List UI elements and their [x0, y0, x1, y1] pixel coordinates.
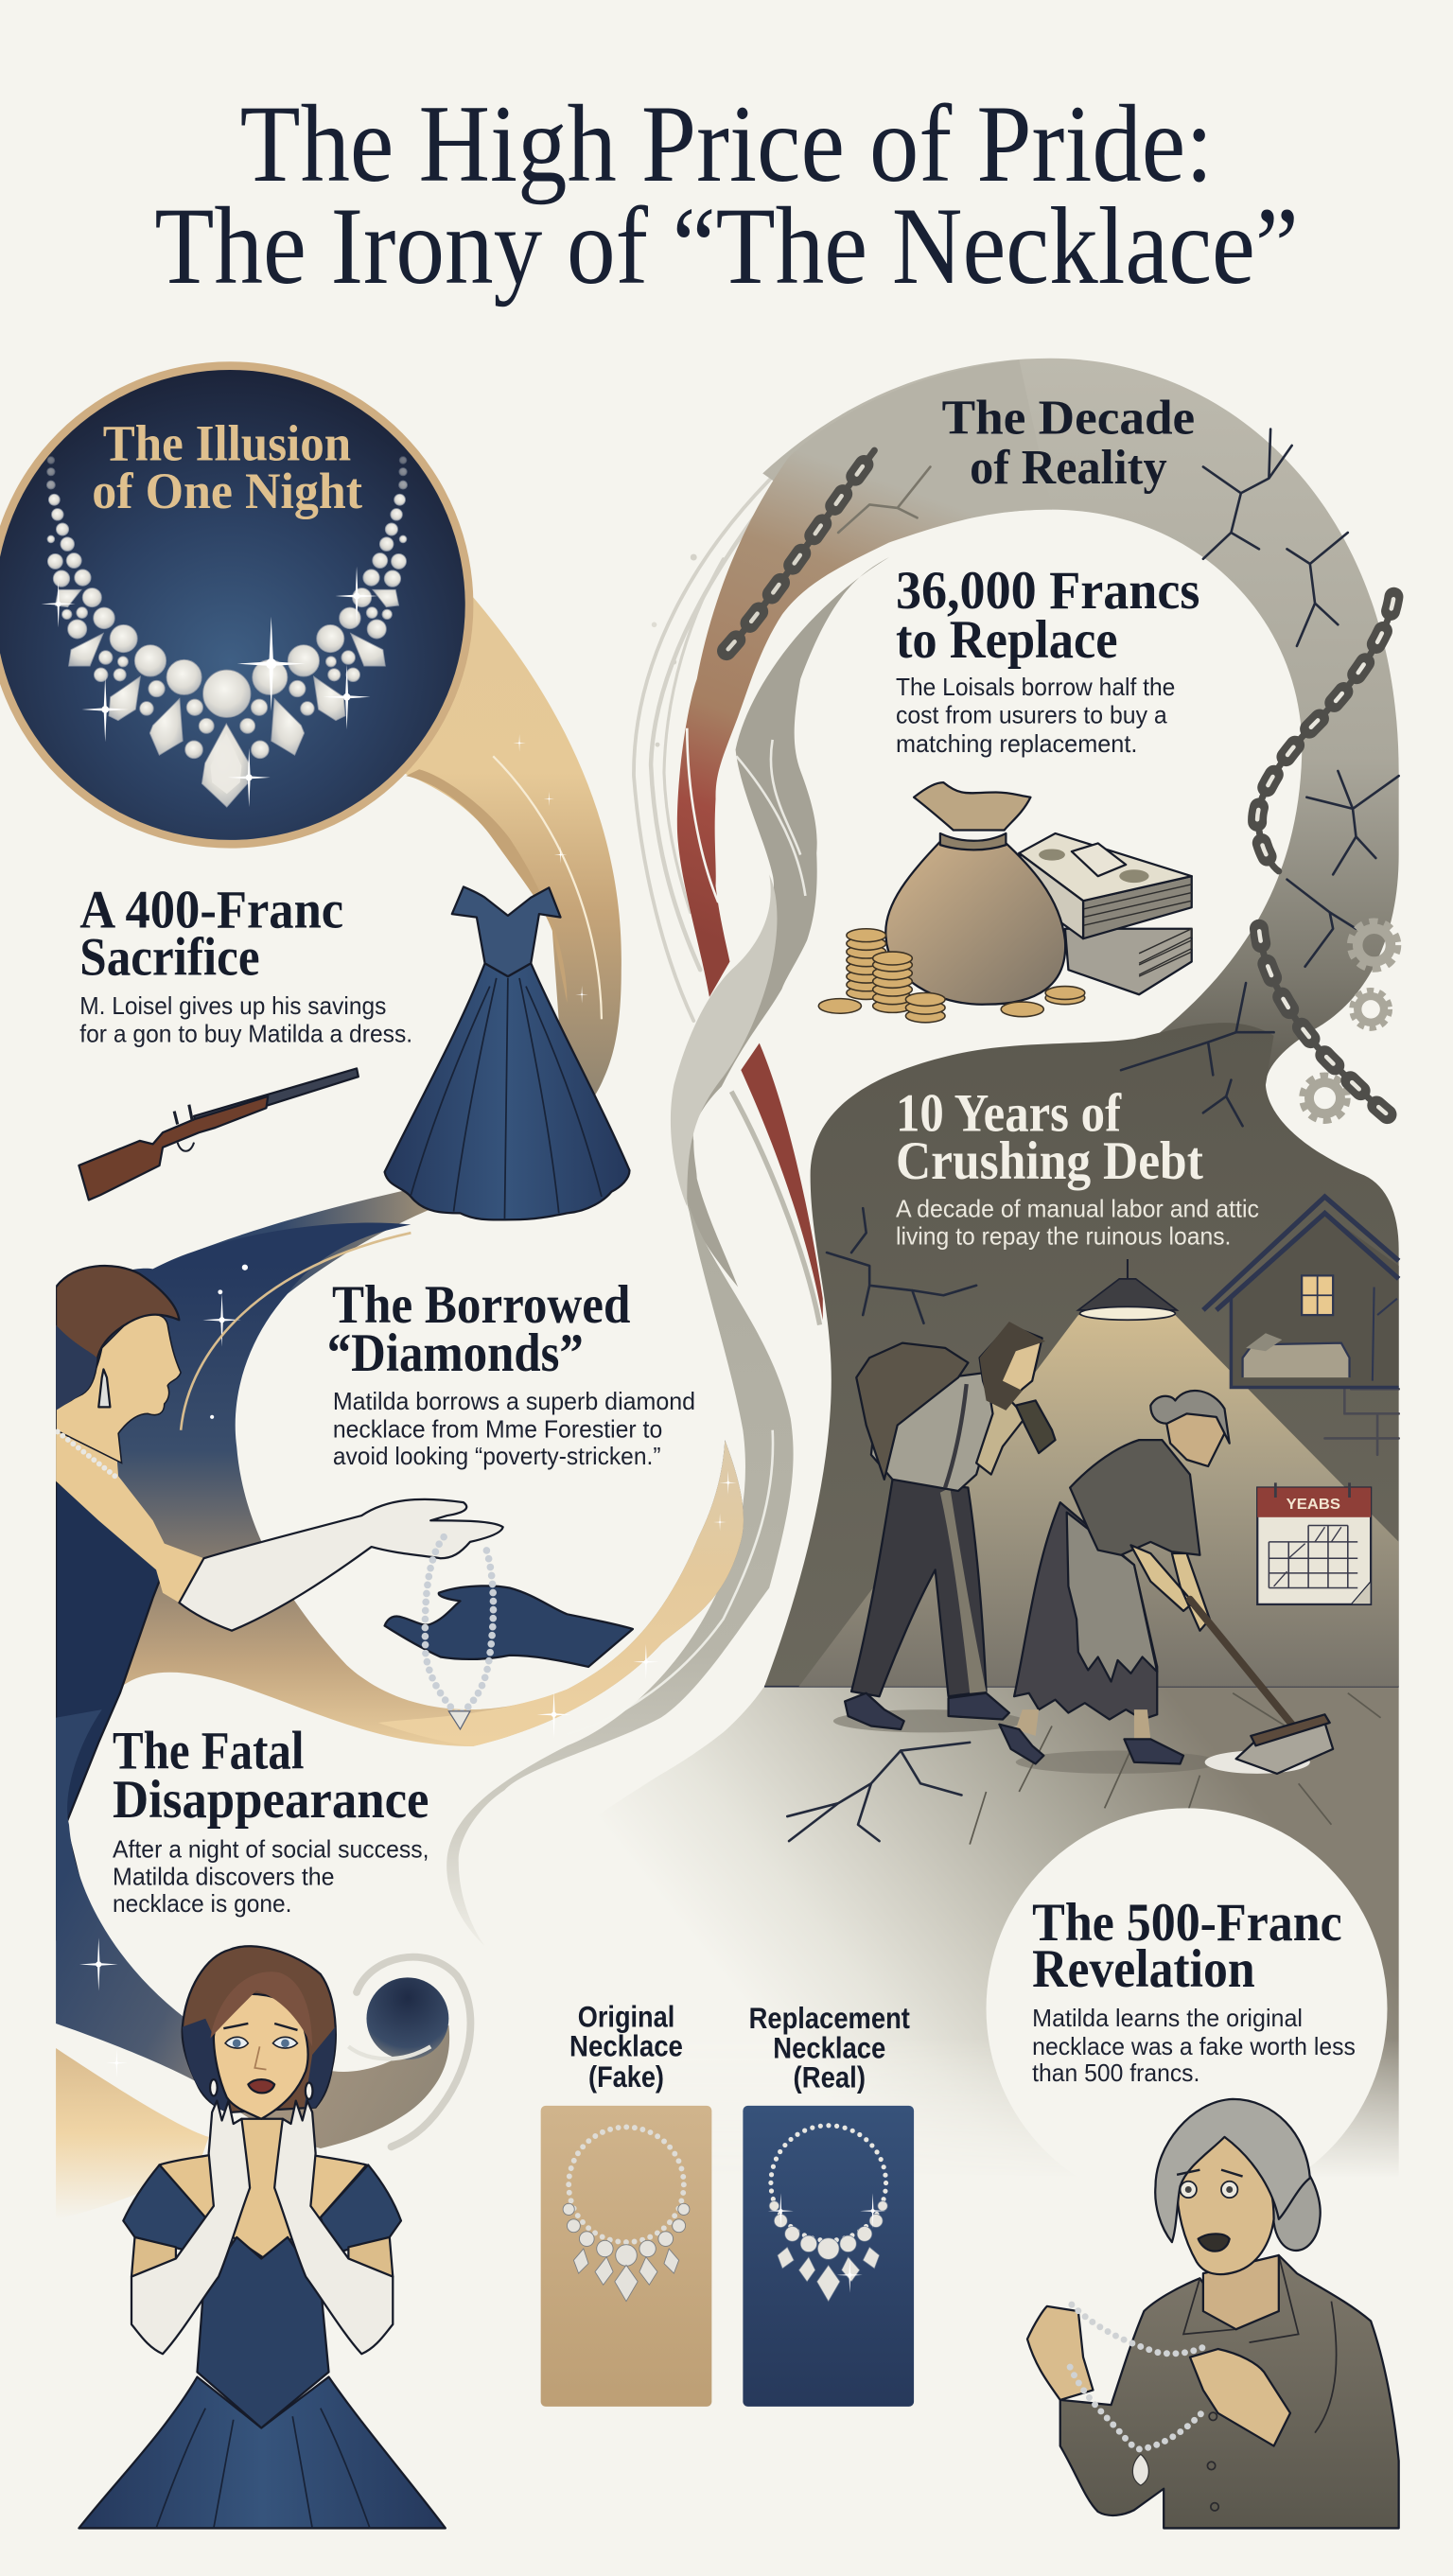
right glove: [274, 2101, 393, 2354]
mouth: [248, 2079, 274, 2093]
text block: the fatal disappearance: [113, 1722, 429, 1918]
man shoes: [845, 1693, 1009, 1729]
hair back: [183, 1946, 336, 2112]
heading and text: 10 years of crushing debt: living to repay the ruinous loans.: [896, 1221, 1231, 1250]
shirt: [1060, 2255, 1399, 2528]
man arm: [976, 1375, 1025, 1475]
panel: the borrowed diamonds swoosh: [56, 1223, 744, 1746]
comparison: original necklace fake: [541, 2000, 711, 2407]
eyes: [225, 2037, 297, 2048]
thin strand: [731, 1092, 820, 1325]
text bubble: the 500-franc revelation: than 500 francs.: [1032, 2059, 1199, 2087]
man hand and strap: [1016, 1400, 1056, 1453]
text block: the borrowed diamonds: avoid looking “poverty-stricken.”: [333, 1442, 660, 1470]
lower red stripe: [741, 1043, 823, 1320]
dress: [56, 1481, 165, 1939]
hair shadow: [183, 2019, 335, 2112]
man sack: [856, 1343, 968, 1480]
hair: [56, 1266, 179, 1407]
text block: the borrowed diamonds: The Borrowed: [332, 1275, 630, 1335]
text block: a 400-franc sacrifice: A 400-Franc: [79, 881, 343, 940]
head: [1165, 1393, 1224, 1466]
wall cracks: [827, 1208, 1399, 1455]
icon: blue ball gown: [385, 886, 629, 1219]
title: The Irony of “The Necklace”: [154, 185, 1299, 307]
man legs: [851, 1480, 987, 1696]
man head: [980, 1325, 1042, 1407]
hair: [1150, 1391, 1230, 1444]
icon: money bag: [885, 782, 1065, 1005]
skirt: [1014, 1502, 1157, 1720]
text bubble: the 500-franc revelation: [987, 1808, 1387, 2209]
white glove: [179, 1499, 503, 1631]
earrings: [210, 2079, 218, 2095]
heading: the decade of reality: [942, 392, 1195, 495]
panel: the illusion of one night: of One Night: [92, 463, 362, 519]
neck: [1203, 2255, 1279, 2329]
fake necklace: [563, 2127, 690, 2302]
text block: a 400-franc sacrifice: M. Loisel gives up his savings: [79, 991, 386, 1020]
text block: the borrowed diamonds: necklace from Mme Forestier to: [333, 1414, 662, 1443]
face: [56, 1314, 181, 1463]
icon: hanging diamond necklace: [425, 1537, 493, 1729]
heading and text: 36,000 francs: The Loisals borrow half the: [896, 673, 1175, 701]
necklace on neck: [58, 1431, 115, 1476]
heading and text: 10 years of crushing debt: A decade of manual labor and attic: [896, 1195, 1259, 1223]
chains: [726, 450, 1393, 1114]
apron: [1067, 1513, 1157, 1682]
figure: matilda with gloved arm: [56, 1266, 503, 1939]
heading: The Illusion: [103, 415, 351, 472]
figure: distressed matilda: [79, 1946, 446, 2528]
face: [1177, 2137, 1274, 2274]
title: [154, 83, 1299, 307]
light cone from lamp: [798, 1315, 1399, 1687]
text block: the fatal disappearance: After a night of social success,: [113, 1834, 429, 1863]
icon: coin stacks: [818, 929, 1085, 1023]
comparison: replacement necklace real: [743, 2002, 914, 2407]
mouth: [1199, 2234, 1230, 2252]
icon: banknote stacks: [1019, 833, 1192, 994]
dark upper ribbon: [673, 557, 889, 1288]
panel: 10 years of crushing debt wall: [764, 1023, 1399, 1687]
eyes and brows: [1177, 2170, 1243, 2198]
text bubble: the 500-franc revelation: Revelation: [1032, 1939, 1255, 1999]
cracks on ring: [838, 429, 1399, 967]
heading and text: 36,000 francs: to Replace: [896, 610, 1118, 670]
icon: swirl: [79, 1937, 470, 2147]
lower ribbon under dress: [153, 1177, 477, 1293]
heading: the decade of reality: of Reality: [970, 441, 1167, 495]
light ribbon: [671, 874, 777, 1206]
text block: a 400-franc sacrifice: Sacrifice: [79, 927, 260, 987]
hair bun: [1266, 2137, 1321, 2251]
broom: [1190, 1600, 1292, 1725]
neck and chest: [56, 1413, 203, 1603]
cracks bridging ring and wall: [1121, 983, 1274, 1126]
heading and text: 36,000 francs: [896, 561, 1199, 758]
man shirt: [871, 1373, 999, 1491]
figure: man with sack: [845, 1322, 1056, 1729]
hair dark lower: [56, 1325, 97, 1411]
ring left ribbon from brown to red: [677, 360, 1052, 997]
comparison: original necklace fake: Necklace: [569, 2030, 683, 2063]
heading: the decade of reality: The Decade: [942, 392, 1195, 446]
thin grey ribbon lines: [634, 473, 776, 1021]
bead necklace: [1070, 2304, 1203, 2485]
title: The High Price of Pride:: [240, 83, 1213, 205]
text bubble: the 500-franc revelation: necklace was a fake worth less: [1032, 2032, 1356, 2060]
comparison: replacement necklace real: Replacement: [749, 2002, 910, 2035]
comparison: original necklace fake: (Fake): [588, 2060, 664, 2094]
left glove: [131, 2101, 250, 2354]
text block: a 400-franc sacrifice: for a gon to buy Matilda a dress.: [79, 1020, 412, 1048]
text bubble: the 500-franc revelation: Matilda learns the original: [1032, 2004, 1303, 2032]
text block: a 400-franc sacrifice: [79, 881, 412, 1048]
panel: the decade of reality ring: [677, 359, 1399, 1085]
real necklace: [768, 2126, 887, 2302]
hands: [1027, 2306, 1290, 2446]
gold right arc of swoosh: [378, 1440, 744, 1746]
man hair and beard: [980, 1322, 1045, 1411]
highlight line on red ribbon: [687, 728, 718, 902]
lower wave band: [446, 1200, 794, 1946]
sleeves: [123, 2164, 401, 2253]
text block: the borrowed diamonds: [327, 1275, 695, 1470]
panel: the illusion of one night: [0, 361, 473, 849]
icon: calendar: [1257, 1482, 1371, 1604]
heading and text: 36,000 francs: matching replacement.: [896, 729, 1137, 758]
heading and text: 36,000 francs: 36,000 Francs: [896, 561, 1199, 621]
fringe: [210, 1971, 312, 2046]
heading and text: 36,000 francs: cost from usurers to buy a: [896, 701, 1167, 729]
figure: aged matilda: [1027, 2099, 1399, 2528]
text block: the fatal disappearance: necklace is gone.: [113, 1889, 291, 1918]
gears: [1303, 922, 1397, 1120]
floor shadows, boards and cracks: [764, 1687, 1399, 1845]
necklace: [42, 457, 408, 807]
figure: old woman sweeping: [999, 1391, 1333, 1774]
icon: hanging lamp: [1078, 1259, 1177, 1320]
skirt: [79, 2377, 446, 2528]
text block: the fatal disappearance: The Fatal: [113, 1722, 304, 1781]
icon: navy hand: [385, 1586, 633, 1667]
neck and chest: [160, 2119, 366, 2258]
upper arms: [131, 2237, 393, 2277]
face: [214, 1994, 308, 2119]
text block: the fatal disappearance: Disappearance: [113, 1770, 429, 1830]
heading and text: 10 years of crushing debt: Crushing Debt: [896, 1131, 1203, 1191]
heading and text: 10 years of crushing debt: [896, 1083, 1259, 1250]
text block: the borrowed diamonds: “Diamonds”: [327, 1323, 584, 1383]
sparkles on swoosh: [181, 1233, 737, 1738]
earring: [98, 1369, 110, 1407]
blouse: [1070, 1440, 1199, 1555]
lower gold band: [56, 2048, 209, 2219]
comparison: replacement necklace real: Necklace: [773, 2031, 885, 2064]
upper gold ribbon: [394, 579, 621, 1134]
text block: the fatal disappearance: Matilda discovers the: [113, 1862, 335, 1890]
heading and text: 10 years of crushing debt: 10 Years of: [896, 1083, 1122, 1143]
hair: [1155, 2099, 1310, 2242]
text bubble: the 500-franc revelation: The 500-Franc: [1032, 1893, 1342, 1953]
legs and shoes: [1016, 1709, 1150, 1739]
bodice: [198, 2237, 329, 2427]
icon: rifle: [79, 1068, 359, 1200]
floor: [636, 1686, 1399, 2166]
text block: the borrowed diamonds: Matilda borrows a superb diamond: [333, 1387, 695, 1415]
lower navy band and swirl tail: [56, 1709, 449, 2148]
suspenders: [945, 1384, 967, 1488]
comparison: replacement necklace real: (Real): [794, 2061, 866, 2094]
icon: calendar: YEABS: [1287, 1497, 1340, 1513]
comparison: original necklace fake: Original: [578, 2000, 674, 2033]
grey flowing ribbons: [446, 557, 889, 1946]
ribbon highlights: [567, 740, 805, 1734]
icon: attic room: [1203, 1197, 1399, 1388]
arms: [1130, 1545, 1210, 1631]
